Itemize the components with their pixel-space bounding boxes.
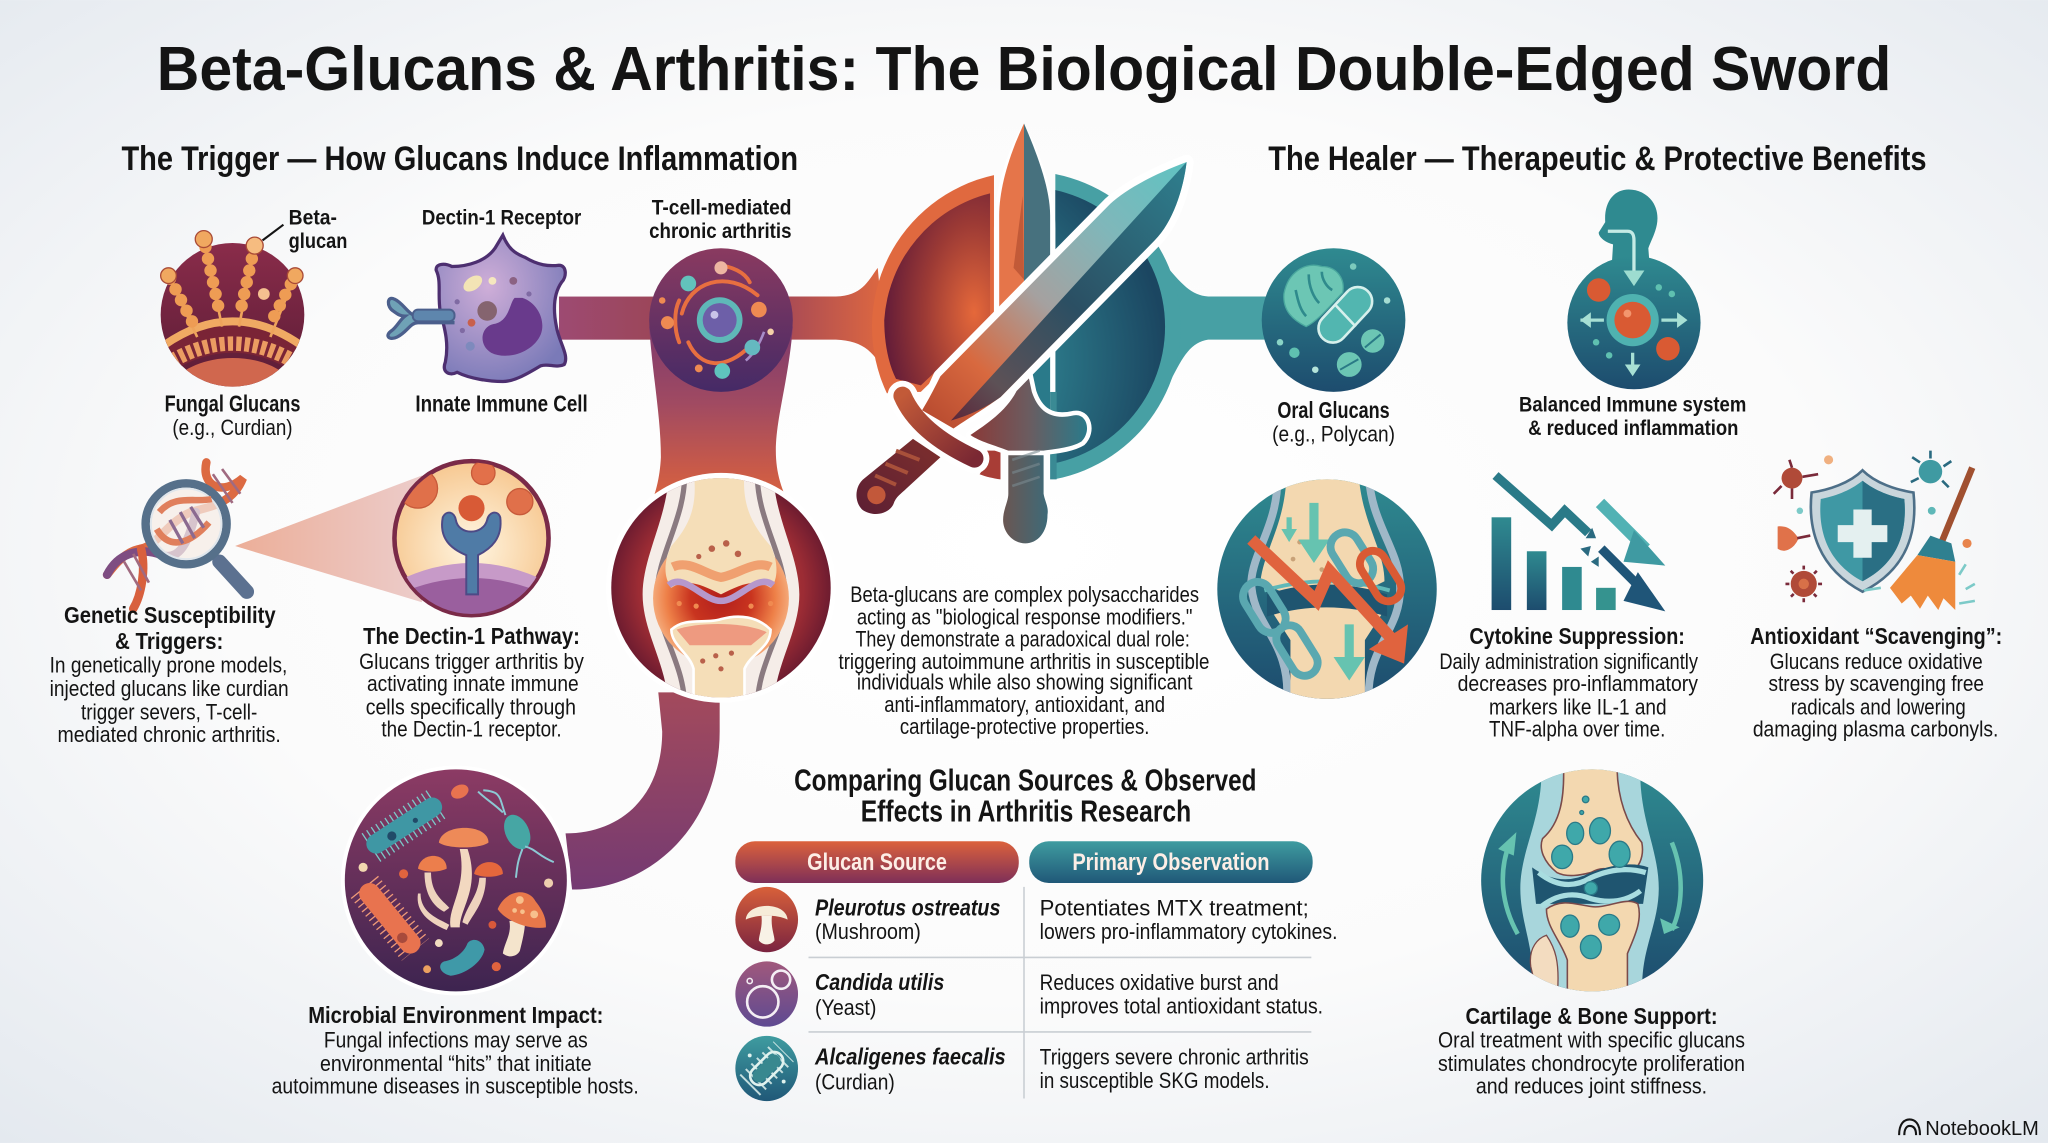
text: genetic susceptibility: & Triggers: — [115, 628, 223, 654]
label: beta-glucan — [289, 205, 347, 253]
heading: the healer: The Healer — Therapeutic & Protective Benefits — [1268, 140, 1927, 178]
pill: glucan source — [735, 841, 1019, 883]
notebooklm mark: NotebookLM — [1925, 1118, 2039, 1140]
label: balanced immune system — [1519, 392, 1746, 440]
label: oral glucans: Oral Glucans — [1277, 397, 1390, 423]
text: intro paragraph: triggering autoimmune arthritis in susceptible — [839, 649, 1209, 674]
heading: the trigger: The Trigger — How Glucans Induce Inflammation — [121, 140, 798, 178]
text: intro paragraph: Beta-glucans are complex polysaccharides — [850, 582, 1199, 607]
label: beta-glucan: Beta- — [289, 205, 337, 230]
label: balanced immune system: Balanced Immune system — [1519, 391, 1746, 416]
label: oral glucans: (e.g., Polycan) — [1272, 422, 1395, 447]
orange bacterium — [364, 887, 415, 950]
label: t-cell-mediated chronic arthritis — [649, 194, 792, 243]
text: microbial environment impact: environmental “hits” that initiate — [320, 1051, 592, 1076]
row: alcaligenes faecalis: Alcaligenes faecalis — [814, 1044, 1006, 1070]
text: dectin-1 pathway: The Dectin-1 Pathway: — [363, 623, 580, 649]
text: cartilage & bone support: Cartilage & Bone Support: — [1465, 1003, 1718, 1029]
row: pleurotus ostreatus: Pleurotus ostreatus — [815, 895, 1000, 921]
flagellate and specks — [359, 782, 554, 976]
icon: mushroom — [735, 887, 798, 952]
text: cytokine suppression: markers like IL-1 and — [1489, 695, 1667, 720]
text: microbial environment impact — [272, 1002, 639, 1098]
row: pleurotus ostreatus: (Mushroom) — [815, 919, 921, 944]
icon: healthy cartilage joint — [1481, 764, 1703, 999]
text: intro paragraph: They demonstrate a paradoxical dual role: — [856, 627, 1190, 652]
text: microbial environment impact: Microbial Environment Impact: — [308, 1002, 603, 1028]
text: dectin-1 pathway — [359, 623, 585, 742]
row: candida utilis — [815, 969, 1323, 1020]
text: genetic susceptibility: mediated chronic arthritis. — [57, 722, 281, 747]
row: candida utilis: Candida utilis — [815, 969, 944, 995]
left half disc — [872, 175, 1000, 479]
text: genetic susceptibility: Genetic Susceptibility — [64, 602, 276, 628]
text: antioxidant scavenging: Glucans reduce oxidative — [1770, 649, 1983, 674]
text: cartilage & bone support: stimulates chondrocyte proliferation — [1438, 1051, 1745, 1076]
row: pleurotus ostreatus — [815, 895, 1337, 944]
text: genetic susceptibility: injected glucans like curdian — [50, 676, 289, 701]
label: dectin-1 receptor: Dectin-1 Receptor — [422, 205, 582, 230]
row: alcaligenes faecalis: in susceptible SKG models. — [1040, 1068, 1270, 1093]
text: cytokine suppression: Cytokine Suppression: — [1469, 623, 1685, 649]
text: genetic susceptibility: In genetically prone models, — [50, 653, 287, 678]
text: intro paragraph: individuals while also showing significant — [857, 670, 1192, 695]
row: pleurotus ostreatus: lowers pro-inflammatory cytokines. — [1040, 919, 1337, 944]
text: intro paragraph: cartilage-protective properties. — [900, 714, 1149, 739]
row: pleurotus ostreatus: Potentiates MTX treatment; — [1040, 896, 1309, 921]
text: cartilage & bone support — [1438, 1003, 1745, 1098]
text: dectin-1 pathway: activating innate immune — [367, 671, 579, 696]
table: glucan sources — [735, 841, 1337, 1101]
text: antioxidant scavenging: damaging plasma carbonyls. — [1753, 717, 1998, 742]
icon: joint with broken chains — [1217, 470, 1437, 705]
text: dectin-1 pathway: cells specifically through — [366, 695, 576, 720]
row: alcaligenes faecalis: Triggers severe chronic arthritis — [1040, 1045, 1309, 1070]
text: cartilage & bone support: Oral treatment with specific glucans — [1438, 1028, 1745, 1053]
label: oral glucans — [1272, 397, 1395, 447]
label: fungal glucans: Fungal Glucans — [165, 390, 300, 416]
icon: shield and broom — [1774, 451, 1975, 610]
mushroom cluster — [418, 828, 503, 930]
text: antioxidant scavenging: radicals and lowering — [1791, 695, 1966, 720]
pill: primary observation: Primary Observation — [1072, 849, 1270, 876]
flow connectors — [559, 268, 888, 890]
row: candida utilis: (Yeast) — [815, 995, 876, 1020]
heading: comparison table — [794, 762, 1256, 829]
text: genetic susceptibility — [50, 602, 289, 747]
icon: balanced immune system — [1567, 189, 1701, 389]
label: t-cell-mediated chronic arthritis: chronic arthritis — [649, 218, 792, 243]
text: dectin-1 pathway: Glucans trigger arthritis by — [359, 649, 585, 674]
text: intro paragraph — [839, 582, 1209, 739]
vertical sword — [970, 124, 1087, 543]
label: beta-glucan: glucan — [289, 228, 347, 253]
zoom cone — [235, 476, 422, 602]
row: alcaligenes faecalis — [814, 1044, 1309, 1094]
icon: innate immune cell — [388, 235, 566, 381]
icon: yeast — [735, 961, 798, 1027]
text: antioxidant scavenging: Antioxidant “Scavenging”: — [1750, 623, 2002, 649]
label: fungal glucans: (e.g., Curdian) — [172, 415, 293, 440]
text: intro paragraph: acting as "biological response modifiers." — [857, 604, 1192, 629]
teal bacterium — [371, 803, 438, 848]
text: genetic susceptibility: trigger severs, T-cell- — [81, 700, 257, 725]
label: innate immune cell: Innate Immune Cell — [415, 390, 588, 416]
icon: cytokine decline chart — [1492, 476, 1665, 611]
text: microbial environment impact: autoimmune diseases in susceptible hosts. — [272, 1073, 639, 1098]
right half disc — [1055, 174, 1173, 479]
icon: dectin-1 pathway — [392, 461, 551, 627]
text: cytokine suppression — [1439, 623, 1699, 742]
title: Beta-Glucans & Arthritis: The Biological Double-Edged Sword — [157, 35, 1891, 104]
icon: microbial environment — [341, 765, 571, 995]
icon: t-cell — [649, 248, 793, 392]
teal band — [1162, 261, 1273, 381]
fungal glucan icon — [161, 225, 304, 392]
icon: double-edged swords — [856, 124, 1273, 543]
label: t-cell-mediated chronic arthritis: T-cell-mediated — [652, 194, 792, 219]
diagonal sword — [856, 162, 1187, 514]
text: antioxidant scavenging — [1750, 623, 2002, 742]
text: cartilage & bone support: and reduces joint stiffness. — [1476, 1073, 1707, 1098]
text: intro paragraph: anti-inflammatory, antioxidant, and — [884, 692, 1165, 717]
text: cytokine suppression: decreases pro-inflammatory — [1458, 671, 1699, 696]
label: fungal glucans — [165, 390, 300, 440]
text: dectin-1 pathway: the Dectin-1 receptor. — [381, 717, 562, 742]
label: balanced immune system: & reduced inflammation — [1528, 415, 1738, 440]
icon: oral glucans — [1262, 248, 1405, 392]
pill: glucan source: Glucan Source — [807, 849, 947, 876]
spotted mushroom — [498, 892, 546, 956]
text: antioxidant scavenging: stress by scavenging free — [1768, 671, 1984, 696]
text: cytokine suppression: TNF-alpha over time. — [1489, 717, 1665, 742]
heading: comparison table: Effects in Arthritis Research — [861, 794, 1191, 829]
pill: primary observation — [1029, 841, 1313, 883]
icon: inflamed joint — [606, 470, 836, 712]
row: candida utilis: improves total antioxidant status. — [1040, 994, 1323, 1019]
text: cytokine suppression: Daily administration significantly — [1439, 649, 1699, 674]
row: candida utilis: Reduces oxidative burst and — [1040, 970, 1279, 995]
row: alcaligenes faecalis: (Curdian) — [815, 1069, 895, 1094]
icon: dna under magnifier — [107, 462, 247, 609]
icon: bacterium — [735, 1036, 798, 1101]
heading: comparison table: Comparing Glucan Sources & Observed — [794, 762, 1256, 797]
text: microbial environment impact: Fungal infections may serve as — [324, 1028, 588, 1053]
